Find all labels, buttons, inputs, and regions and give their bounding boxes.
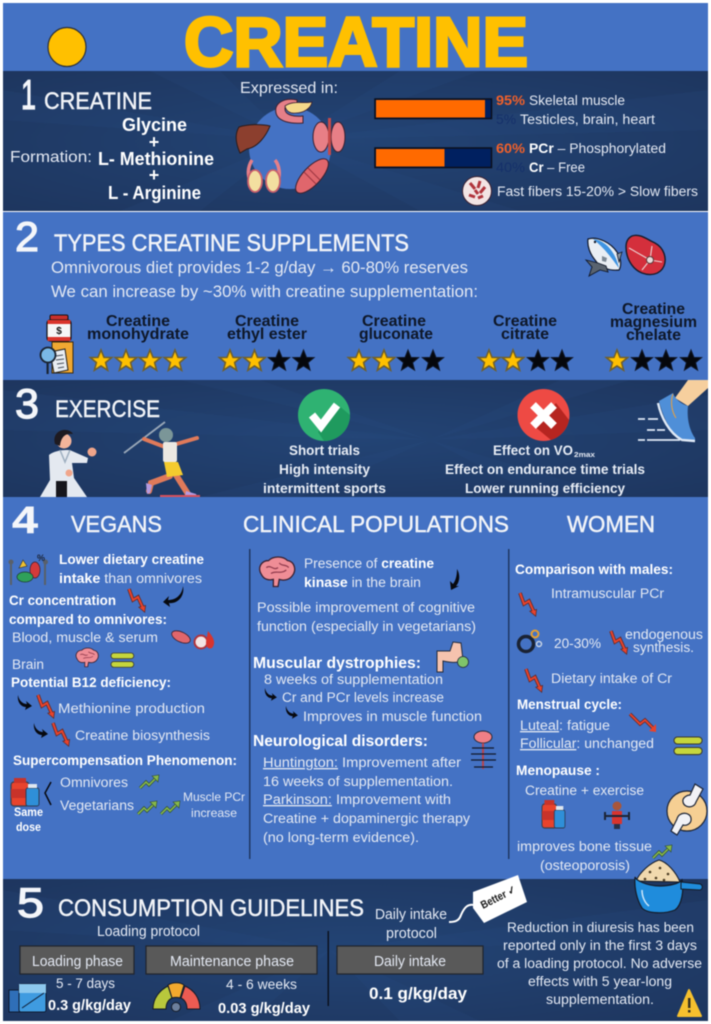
column: women — [515, 562, 707, 873]
title: CREATINE — [184, 3, 528, 81]
text: bone tissue: (osteoporosis) — [540, 858, 630, 873]
icon: supplement jars — [542, 800, 565, 828]
text: cognitive function: Possible improvement of cognitive — [257, 600, 475, 615]
text: muscle pcr increase — [183, 790, 245, 820]
text: cr concentration: Cr concentration — [9, 593, 116, 608]
text: cr concentration — [9, 593, 167, 672]
legend: skeletal muscle: Skeletal muscle — [529, 93, 625, 108]
box: loading phase — [20, 946, 134, 974]
panel: section 5 consumption guidelines — [3, 860, 708, 1021]
section number 4: 4 — [12, 500, 38, 542]
icon: nutrition plate: % — [37, 553, 45, 563]
icon: equals — [111, 653, 134, 667]
panel: title banner — [3, 3, 708, 81]
supplement: gluconate: Creatine — [362, 313, 426, 330]
text: neurological details — [263, 755, 470, 845]
text: dietary intake: Dietary intake of Cr — [551, 671, 673, 686]
icon: running shoe — [638, 380, 708, 441]
text: lower dietary intake: intake than omnivores — [59, 571, 202, 586]
text: muscle pcr increase: Muscle PCr — [183, 790, 245, 804]
text: loading protocol: Loading protocol — [97, 923, 200, 940]
text block: short trials: intermittent sports — [263, 481, 386, 496]
text: menstrual cycle — [517, 697, 654, 751]
text: lower dietary intake — [59, 552, 204, 586]
icon: green check — [298, 389, 350, 441]
legend: creatine forms: Cr – Free — [529, 160, 585, 175]
arrow: red decrease sideways — [630, 714, 656, 732]
text: endogenous synthesis: endogenous — [625, 627, 703, 642]
bar chart: skeletal muscle share — [375, 99, 492, 118]
box: maintenance phase — [146, 946, 317, 974]
icon: supplement jars — [11, 778, 39, 806]
text: omnivores and vegetarians — [60, 775, 134, 813]
text: menstrual cycle: Luteal: fatigue — [520, 718, 610, 733]
text block: safety note: of a loading protocol. No adverse — [497, 956, 702, 971]
text: neurological details: Huntington: Improvement after — [263, 755, 462, 770]
text: maintenance dose — [218, 976, 311, 1017]
text: daily dose: 0.1 g/kg/day — [369, 984, 468, 1003]
legend: creatine forms: 60% — [496, 141, 525, 156]
text: loading dose — [48, 975, 132, 1014]
arrow: curved black — [163, 586, 183, 607]
text: bone tissue — [517, 839, 652, 873]
section number 1: 1 — [21, 71, 36, 118]
supplement: citrate: citrate — [501, 326, 549, 343]
icon: brace — [45, 782, 51, 805]
supplement: magnesium chelate: chelate — [626, 327, 681, 344]
panel: section 1 creatine — [3, 71, 708, 211]
arrows: methionine — [18, 695, 55, 719]
heading: types of supplements: TYPES CREATINE SUPPLEMENTS — [54, 230, 409, 257]
icon: jar — [9, 984, 46, 1012]
text: muscle pcr increase: increase — [191, 806, 237, 820]
legend: creatine forms: PCr – Phosphorylated — [529, 141, 666, 156]
heading: clinical populations: CLINICAL POPULATIONS — [243, 511, 509, 537]
legend: skeletal muscle: Testicles, brain, heart — [520, 112, 655, 127]
heading: exercise: EXERCISE — [55, 396, 160, 423]
arrows: small black — [265, 688, 298, 719]
legend: skeletal muscle — [496, 93, 655, 127]
legend: skeletal muscle: 5% — [496, 112, 516, 127]
text: same dose: dose — [16, 820, 41, 834]
supplement: citrate: Creatine — [493, 313, 557, 330]
text: creatine biosynthesis: Creatine biosynthesis — [75, 728, 210, 743]
arrow: red decrease — [526, 669, 543, 693]
panel: section 4 populations — [3, 497, 708, 879]
icon: meat — [626, 235, 665, 275]
text: methionine production: Methionine production — [58, 701, 205, 716]
text: comparison with males: Comparison with males: — [515, 562, 673, 577]
text block: formation: L - Arginine — [108, 183, 201, 203]
supplement: monohydrate: monohydrate — [87, 326, 189, 343]
supplement: ethyl ester: Creatine — [235, 313, 299, 330]
text: same dose: Same — [14, 805, 43, 819]
text: dystrophy results: 8 weeks of supplementation — [264, 672, 443, 687]
text: bone tissue: improves bone tissue — [517, 839, 652, 854]
text block: formation: + — [149, 132, 159, 152]
text block: formation: Glycine — [122, 115, 187, 135]
icon: supplement jar and report — [40, 315, 73, 374]
arrow: green increase — [653, 845, 672, 858]
text: creatine kinase: kinase in the brain — [304, 575, 421, 590]
text: neurological details: Parkinson: Improvement with — [263, 792, 451, 807]
text: omnivores and vegetarians: Vegetarians — [60, 798, 134, 813]
text: menstrual cycle: Menstrual cycle: — [517, 697, 622, 712]
text: daily intake protocol: Daily intake — [375, 906, 447, 923]
icon: yellow circle — [48, 28, 86, 66]
text: loading dose: 5 - 7 days — [56, 975, 115, 991]
column: clinical populations — [253, 556, 496, 845]
text block: diet reserves — [51, 258, 478, 301]
section number 5: 5 — [17, 879, 44, 926]
icon: muscle fibres — [462, 176, 492, 206]
arrow: red decrease — [520, 593, 537, 617]
text block: safety note: supplementation. — [546, 992, 654, 1007]
text block: endurance effects: 2max — [574, 452, 595, 459]
icon: gears — [518, 630, 542, 652]
text block: endurance effects — [445, 443, 645, 496]
text: menopause — [516, 763, 644, 798]
icon: bone joint — [667, 784, 707, 835]
column: vegans — [8, 552, 245, 834]
text: daily intake protocol: protocol — [386, 925, 437, 942]
panel: section 3 exercise — [3, 380, 708, 497]
arrow: red decrease — [129, 589, 146, 613]
text block: safety note: reported only in the first 3 days — [503, 938, 697, 953]
icon: equals — [674, 737, 702, 755]
legend: skeletal muscle: 95% — [496, 93, 525, 108]
text: fast fibers: Fast fibers 15-20% > Slow fibers — [497, 184, 698, 199]
text: endogenous synthesis — [554, 627, 703, 655]
text: lower dietary intake: Lower dietary creatine — [59, 552, 204, 567]
text: omnivores and vegetarians: Omnivores — [60, 775, 128, 790]
text block: diet reserves: We can increase by ~30% with creatine supplementation: — [51, 282, 478, 301]
text block: short trials: Short trials — [289, 443, 360, 458]
text: creatine kinase — [304, 556, 434, 590]
box: daily intake: Daily intake — [374, 953, 446, 970]
text: dystrophy results: Cr and PCr levels increase — [282, 690, 444, 705]
icon: brain — [76, 648, 98, 667]
supplement: monohydrate: Creatine — [106, 313, 170, 330]
text block: diet reserves: Omnivorous diet provides 1-2 g/day → 60-80% reserves — [51, 258, 468, 277]
text: menopause: Creatine + exercise — [525, 783, 644, 798]
arrows: biosynthesis — [34, 723, 70, 747]
panel: section 2 supplements — [3, 212, 708, 380]
supplement: citrate — [478, 313, 573, 370]
arrow: curved black — [450, 569, 459, 590]
icon: better tag: Better ✓ — [479, 884, 518, 912]
text block: safety note: effects with 5 year-long — [528, 974, 672, 989]
heading: creatine: CREATINE — [44, 88, 152, 115]
supplement: monohydrate — [87, 313, 189, 370]
text: daily intake protocol — [375, 906, 447, 942]
text: dystrophy results — [264, 672, 482, 724]
box: maintenance phase: Maintenance phase — [170, 953, 294, 970]
text block: safety note: Reduction in diuresis has been — [507, 920, 694, 935]
text block: endurance effects: Effect on VO — [493, 443, 573, 458]
text block: formation: L- Methionine — [98, 149, 214, 169]
icon: karate athlete — [40, 430, 96, 497]
text: b12: Potential B12 deficiency: — [11, 675, 171, 690]
heading: expressed in: Expressed in: — [240, 80, 338, 97]
text: supercompensation: Supercompensation Phenomenon: — [13, 753, 237, 768]
text: cognitive function: function (especially in vegetarians) — [257, 619, 476, 634]
arrow: red decrease — [611, 631, 628, 655]
heading: consumption guidelines: CONSUMPTION GUIDELINES — [58, 895, 364, 922]
icon: muscle and blood — [170, 628, 214, 649]
text: neurological details: 16 weeks of supplementation. — [263, 774, 453, 789]
icon: brain — [260, 557, 295, 586]
text block: formation: Formation: — [10, 149, 92, 166]
icon: javelin thrower — [124, 422, 200, 497]
section number 2: 2 — [15, 213, 39, 260]
supplement: gluconate: gluconate — [359, 326, 433, 343]
heading: neurological disorders: Neurological disorders: — [253, 733, 428, 750]
icon: warning triangle — [678, 990, 701, 1016]
text: menopause: Menopause : — [516, 763, 600, 778]
icon: gauge — [153, 983, 200, 1012]
text: neurological details: (no long-term evidence). — [263, 830, 419, 845]
text: loading dose: 0.3 g/kg/day — [48, 997, 132, 1014]
icon: supplement jar and report: $ — [56, 326, 62, 337]
icon: better tag — [449, 875, 527, 923]
legend: creatine forms — [496, 141, 666, 175]
text block: endurance effects: Lower running efficiency — [465, 481, 625, 496]
text: cr concentration: Brain — [12, 657, 44, 672]
icon: woman lifting — [605, 802, 629, 829]
text block: formation — [10, 115, 214, 203]
text: maintenance dose: 4 - 6 weeks — [226, 976, 297, 992]
box: daily intake — [337, 946, 483, 974]
text: same dose — [14, 805, 43, 834]
supplement: ethyl ester — [219, 313, 314, 370]
icon: organs circle — [236, 99, 345, 198]
text block: short trials — [263, 443, 386, 496]
icon: red cross — [518, 389, 570, 441]
supplement: magnesium chelate — [606, 301, 702, 370]
section number 3: 3 — [15, 380, 39, 427]
text: endogenous synthesis: 20-30% — [554, 636, 601, 651]
supplement: magnesium chelate: magnesium — [610, 314, 697, 331]
icon: nervous system — [471, 731, 496, 769]
icon: fish — [586, 238, 622, 276]
icon: nutrition plate — [8, 553, 48, 585]
heading: vegans: VEGANS — [71, 511, 162, 537]
icon: flexed arm — [437, 642, 468, 672]
text block: endurance effects: Effect on endurance time trials — [445, 462, 645, 477]
icon: scoop of powder — [635, 860, 702, 913]
text block: safety note — [497, 920, 702, 1007]
heading: women: WOMEN — [567, 511, 655, 537]
text: intramuscular pcr: Intramuscular PCr — [551, 586, 665, 601]
text: menstrual cycle: Follicular: unchanged — [520, 736, 654, 751]
legend: creatine forms: 40% — [496, 160, 525, 175]
text: cognitive function — [257, 600, 476, 634]
text: creatine kinase: Presence of creatine — [304, 556, 434, 571]
text: neurological details: Creatine + dopaminergic therapy — [263, 811, 470, 826]
text: dystrophy results: Improves in muscle function — [303, 709, 482, 724]
supplement: ethyl ester: ethyl ester — [227, 326, 307, 343]
heading: muscular dystrophies: Muscular dystrophies: — [253, 655, 421, 672]
text block: formation: + — [149, 165, 159, 185]
text block: short trials: High intensity — [279, 462, 370, 477]
supplement: magnesium chelate: Creatine — [622, 301, 685, 318]
text: endogenous synthesis: synthesis. — [633, 640, 694, 655]
bar chart: creatine forms — [375, 148, 492, 168]
supplement: gluconate — [348, 313, 444, 370]
text: maintenance dose: 0.03 g/kg/day — [218, 1000, 311, 1017]
arrows: green increases — [138, 775, 180, 814]
box: loading phase: Loading phase — [32, 953, 123, 970]
text: cr concentration: Blood, muscle & serum — [12, 630, 158, 645]
text: cr concentration: compared to omnivores: — [9, 612, 167, 627]
